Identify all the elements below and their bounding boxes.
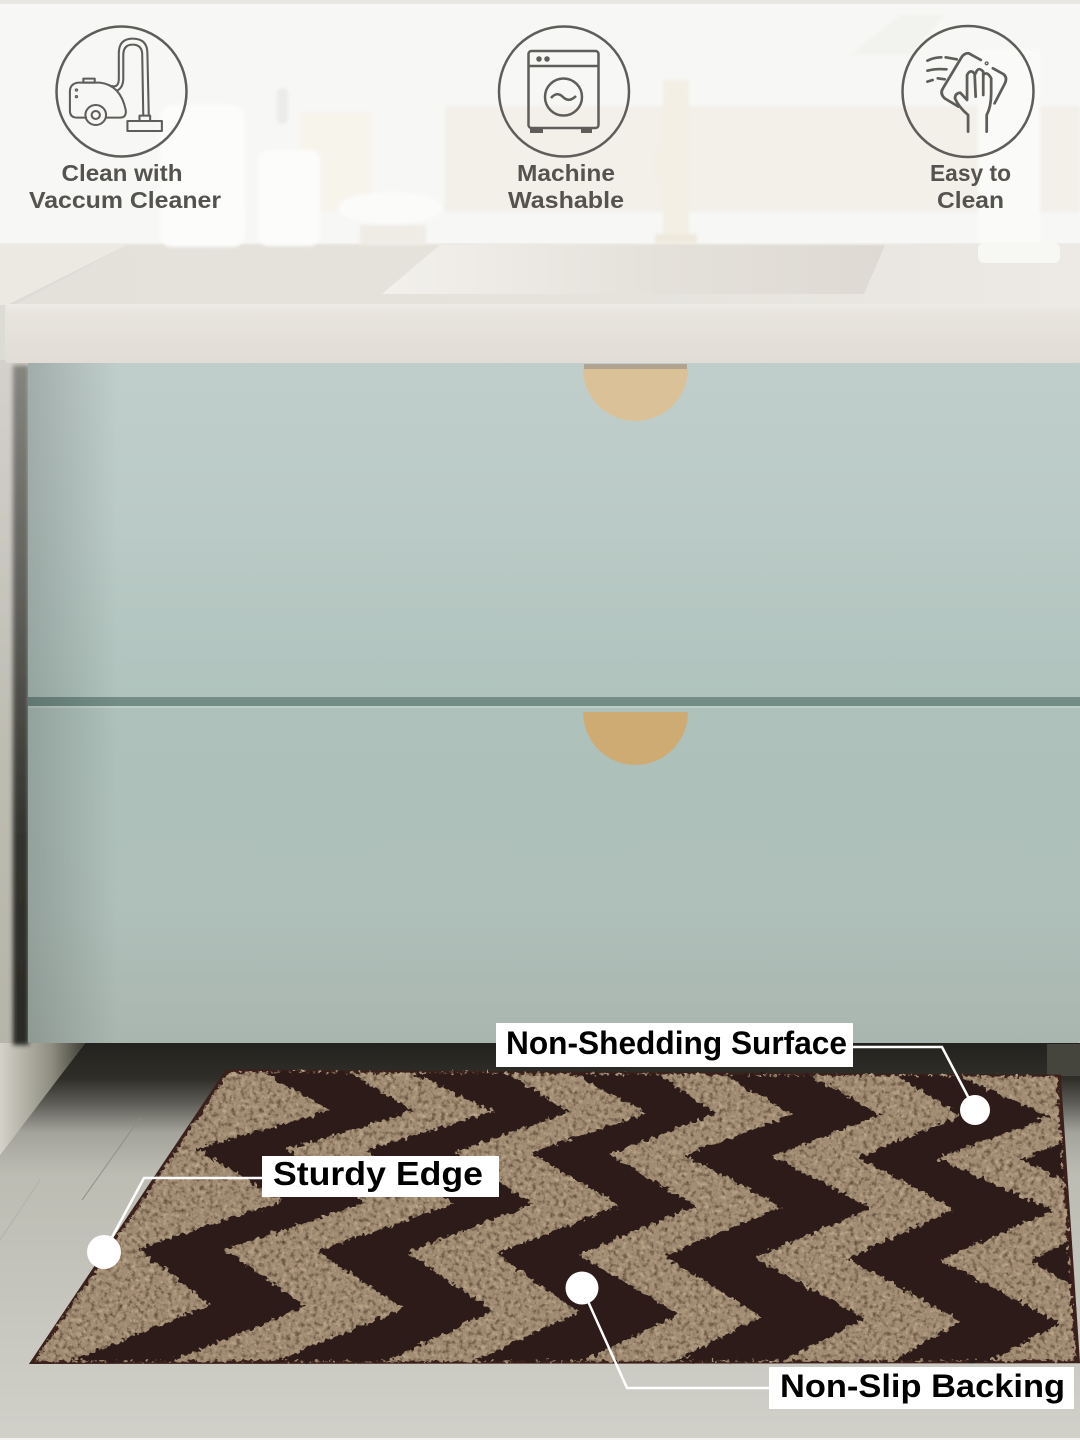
toothbrush holder [258, 150, 320, 246]
callout: non-slip backing [566, 1272, 1074, 1409]
icon: washing machine [499, 26, 629, 156]
callout: non-shedding surface: Non-Shedding Surface [506, 1025, 847, 1061]
sink basin [382, 245, 885, 294]
rug dark chevron bands [65, 1070, 1080, 1363]
top translucent banner [0, 0, 1080, 263]
upper drawer [28, 363, 1080, 697]
soap dish [338, 192, 442, 245]
countertop surface [5, 243, 1080, 310]
lower drawer [28, 706, 1080, 1043]
label: machine: Machine [517, 160, 615, 186]
toothbrush [277, 88, 288, 124]
icon: vacuum cleaner [56, 26, 186, 156]
bottle [160, 105, 245, 247]
feature: clean with vacuum cleaner [29, 26, 221, 213]
feature: machine washable [499, 26, 629, 213]
label: vaccum cleaner: Vaccum Cleaner [29, 187, 221, 213]
vase [978, 50, 1040, 243]
callout: sturdy edge [87, 1155, 499, 1269]
upper brass handle [583, 369, 688, 421]
right floor column [1047, 1044, 1080, 1076]
lower brass handle [583, 712, 688, 765]
drawer gap [28, 697, 1080, 706]
callout: non-slip backing: Non-Slip Backing [780, 1368, 1065, 1404]
icon: hand wiping with cloth [902, 26, 1034, 157]
callout: non-shedding surface [496, 1023, 990, 1125]
feature: easy to clean [902, 26, 1034, 213]
floor [0, 1043, 1080, 1440]
countertop front edge [5, 304, 1080, 363]
faucet [654, 80, 697, 243]
left wall strip [0, 360, 28, 1044]
chevron rug [29, 1069, 1080, 1364]
label: washable: Washable [508, 187, 624, 213]
label: clean: Clean [937, 187, 1004, 213]
label: clean with: Clean with [62, 160, 182, 186]
label: easy to: Easy to [930, 160, 1011, 186]
callout: sturdy edge: Sturdy Edge [273, 1155, 483, 1192]
banner backdrop objects [0, 15, 1080, 247]
rug tan base [34, 1072, 1075, 1361]
